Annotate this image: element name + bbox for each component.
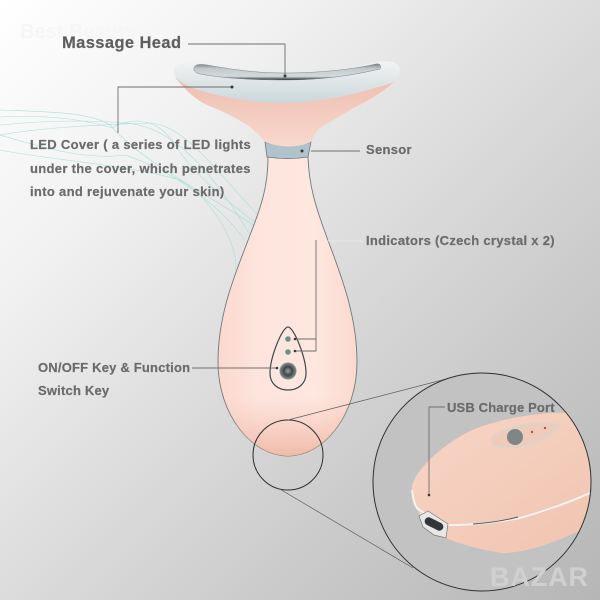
leader lines and dots: [118, 44, 445, 495]
indicator lights: [285, 336, 291, 355]
magnified device: [412, 412, 600, 553]
faint watermark text: Best Beauty: [20, 21, 136, 43]
device body: [218, 157, 357, 456]
magnified control panel: [492, 423, 557, 448]
teal wave lines: [0, 110, 258, 270]
label: USB Charge Port: USB Charge Port: [447, 400, 555, 415]
label: Sensor: Sensor: [366, 142, 412, 157]
label: ON/OFF key: [38, 360, 190, 398]
label: ON/OFF key: ON/OFF Key & Function: [38, 360, 190, 375]
usb port: [419, 511, 448, 538]
metal massage plate: [194, 64, 381, 80]
connector lines to magnified view: [278, 378, 450, 568]
label: Indicators: Indicators (Czech crystal x 2): [366, 233, 555, 248]
control panel: [270, 327, 306, 390]
text block: LED Cover: under the cover, which penetrates: [30, 161, 251, 176]
device: neck massager: [174, 61, 400, 456]
text block: LED Cover: into and rejuvenate your skin): [30, 184, 225, 199]
head white cover: [174, 61, 400, 103]
magnified USB port view: [373, 373, 600, 591]
heading: Massage Head: Massage Head: [62, 34, 181, 52]
label: ON/OFF key: Switch Key: [38, 383, 110, 398]
power button: [280, 362, 296, 380]
magnifier circle on device bottom: [253, 420, 323, 490]
text block: LED Cover: LED Cover ( a series of LED lights: [30, 137, 251, 152]
sensor band: [265, 142, 311, 158]
text block: LED Cover: [30, 137, 251, 199]
watermark: Bazar: BAZAR: [490, 562, 588, 592]
head underside: [175, 77, 398, 146]
